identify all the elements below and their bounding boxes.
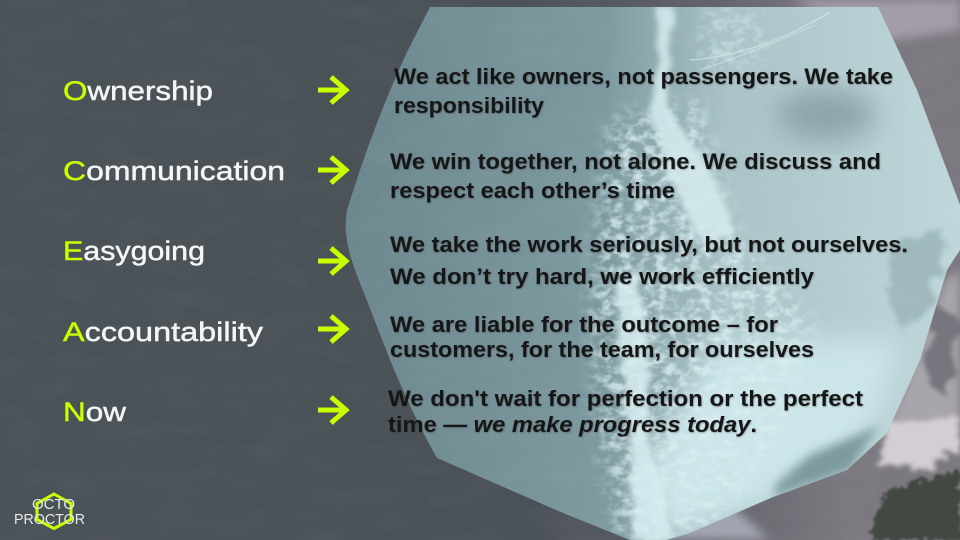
heading: Easygoing: Easygoing <box>63 236 205 266</box>
foam: bright strip <box>652 8 735 240</box>
text: Communication description: We win together, not alone. We discuss and <box>390 149 881 174</box>
icon: lime hexagon <box>37 494 71 528</box>
arrow: Communication <box>318 157 346 183</box>
heading: Communication: Communication <box>63 156 285 186</box>
text: Ownership description: We act like owners, not passengers. We take <box>394 64 893 89</box>
row: Accountability <box>63 312 814 362</box>
logo text: OCTO <box>32 497 75 513</box>
row: Ownership <box>63 64 893 118</box>
foam: mottled surf <box>590 100 810 540</box>
text: Accountability description: customers, for the team, for ourselves <box>390 337 814 362</box>
panel: translucent teal shape <box>340 0 960 540</box>
text: Now description: We don't wait for perfection or the perfect <box>388 386 864 411</box>
logo text <box>14 497 85 528</box>
heading: Now: Now <box>63 397 127 427</box>
text: Now description <box>388 386 864 437</box>
text: Ownership description <box>394 64 893 118</box>
text: Easygoing description: We take the work seriously, but not ourselves. <box>390 232 908 257</box>
arrow: Now <box>318 397 346 423</box>
text: Now description: time — we make progress today . <box>388 412 757 437</box>
row: Easygoing <box>63 232 908 289</box>
row: Now <box>63 386 864 437</box>
arrow: Accountability <box>318 316 346 342</box>
text: Easygoing description <box>390 232 908 289</box>
arrow: Easygoing <box>318 248 346 274</box>
logo text: PROCTOR <box>14 512 85 528</box>
heading: Accountability: Accountability <box>63 317 264 347</box>
text: Easygoing description: We don’t try hard, we work efficiently <box>390 264 815 289</box>
row: Communication <box>63 149 881 203</box>
text: Accountability description <box>390 312 814 362</box>
text: Communication description <box>390 149 881 203</box>
logo: OctoProctor <box>14 494 85 528</box>
text: Communication description: respect each other’s time <box>390 178 675 203</box>
heading: Ownership: Ownership <box>63 76 213 106</box>
arrow: Ownership <box>318 77 346 103</box>
text: Accountability description: We are liable for the outcome – for <box>390 312 778 337</box>
text: Ownership description: responsibility <box>394 93 545 118</box>
